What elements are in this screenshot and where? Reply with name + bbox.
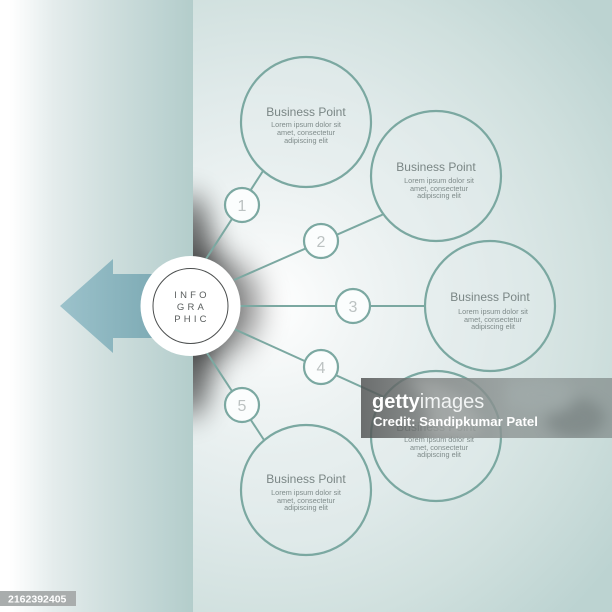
- number node 4: 4: [317, 360, 326, 377]
- circle: business point 3: Lorem ipsum dolor sit: [458, 307, 528, 316]
- hub circle: [140, 256, 240, 356]
- circle: business point 1: [241, 57, 371, 187]
- number node 5: 5: [238, 398, 247, 415]
- circle: business point 1: amet, consectetur: [277, 128, 336, 137]
- circle: business point 2: [371, 111, 501, 241]
- circle: business point 4: adipiscing elit: [417, 450, 461, 459]
- circle: business point 4: amet, consectetur: [410, 443, 469, 452]
- circle: business point 5: [241, 425, 371, 555]
- number node 1: 1: [238, 198, 247, 215]
- hub shadow: [158, 194, 258, 418]
- number node 3: 3: [349, 299, 358, 316]
- number node 2: [304, 224, 338, 258]
- number node 2: 2: [317, 234, 326, 251]
- number node 1: [225, 188, 259, 222]
- image id tag: [0, 591, 76, 606]
- circle: business point 1: adipiscing elit: [284, 136, 328, 145]
- watermark band: [361, 377, 612, 438]
- circle: business point 1: Lorem ipsum dolor sit: [271, 120, 341, 129]
- circle: business point 4: [371, 371, 501, 501]
- circle: business point 2: amet, consectetur: [410, 184, 469, 193]
- circle: business point 5: adipiscing elit: [284, 503, 328, 512]
- circle: business point 3: Business Point: [450, 290, 530, 304]
- hub circle: INFO: [174, 290, 210, 301]
- number node 4: [304, 350, 338, 384]
- circle: business point 1: Business Point: [266, 105, 346, 119]
- hub circle: PHIC: [174, 314, 210, 325]
- image id tag: 2162392405: [8, 594, 67, 606]
- number node 5: [225, 388, 259, 422]
- right panel: [193, 0, 612, 612]
- circle: business point 2: Business Point: [396, 160, 476, 174]
- circle: business point 5: Business Point: [266, 472, 346, 486]
- circle: business point 3: amet, consectetur: [464, 315, 523, 324]
- circle: business point 5: amet, consectetur: [277, 496, 336, 505]
- left panel: [0, 0, 193, 612]
- circle: business point 3: [425, 241, 555, 371]
- circle: business point 3: adipiscing elit: [471, 322, 515, 331]
- circle: business point 2: Lorem ipsum dolor sit: [404, 176, 474, 185]
- circle: business point 4: Business Point: [396, 420, 476, 434]
- watermark logo: gettyimages: [372, 391, 484, 413]
- circle: business point 5: Lorem ipsum dolor sit: [271, 488, 341, 497]
- watermark credit: Credit: Sandipkumar Patel: [373, 414, 538, 429]
- circle: business point 2: adipiscing elit: [417, 191, 461, 200]
- circle: business point 4: Lorem ipsum dolor sit: [404, 435, 474, 444]
- connector lines: [206, 171, 426, 440]
- arrow: [60, 259, 152, 353]
- hub circle: GRA: [177, 302, 207, 313]
- number node 3: [336, 289, 370, 323]
